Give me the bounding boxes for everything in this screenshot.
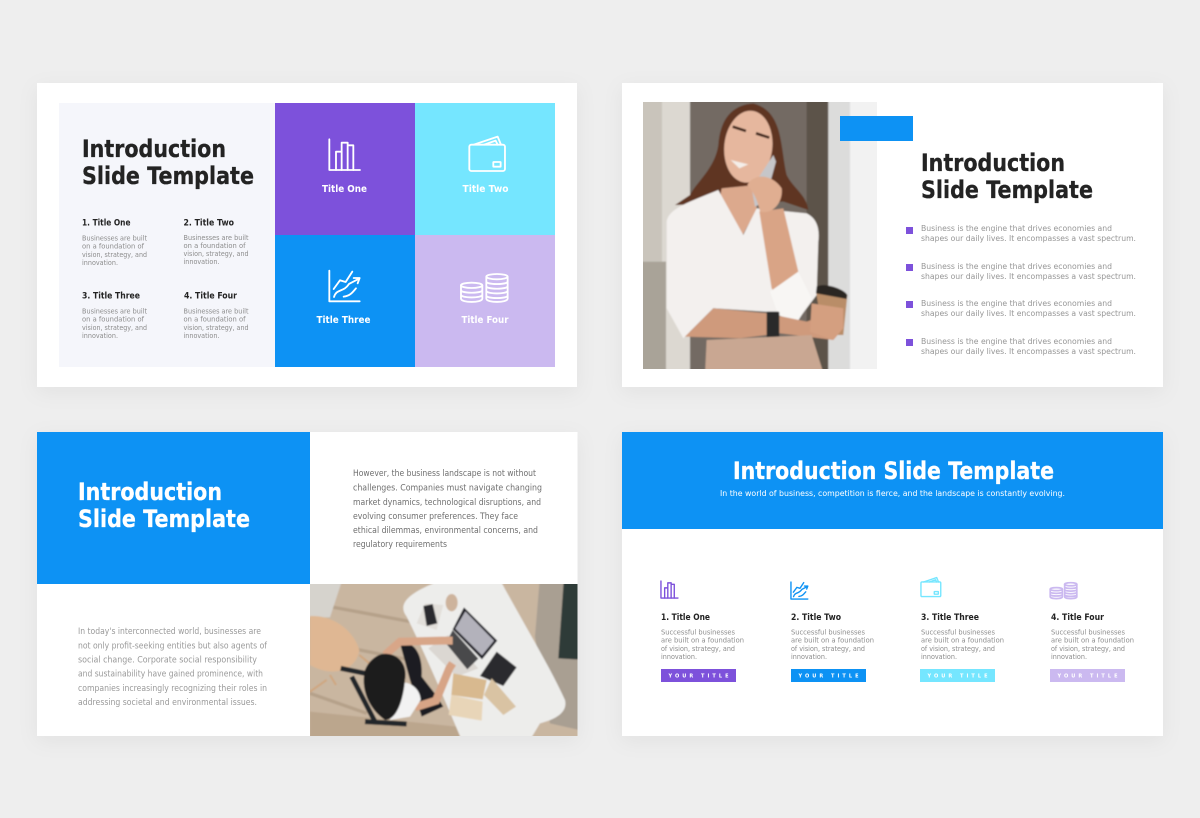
text block: social change: not only profit-seeking entities but also agents of <box>78 642 268 652</box>
column: title two: of vision, strategy, and <box>791 645 865 653</box>
text block: challenges: market dynamics, technological disruptions, and <box>353 498 541 508</box>
column: title two: innovation. <box>791 653 827 661</box>
text block: title three <box>82 290 147 340</box>
text block: challenges: ethical dilemmas, environmental concerns, and <box>353 526 538 536</box>
panel: slide 4 four columns <box>622 432 1163 736</box>
text block: challenges: However, the business landscape is not without <box>353 469 537 479</box>
heading: slide 1: Introduction <box>82 135 226 163</box>
accent block <box>840 116 913 141</box>
text block: title one: vision, strategy, and <box>82 251 147 259</box>
bullet 3: shapes our daily lives. It encompasses a vast spectrum. <box>921 308 1136 318</box>
text block: title one: innovation. <box>82 259 118 267</box>
icon: trend chart <box>791 582 808 599</box>
bullet 2: shapes our daily lives. It encompasses a vast spectrum. <box>921 271 1136 281</box>
text block: title four: Businesses are built <box>184 308 249 316</box>
tile: title four: Title Four <box>462 315 509 326</box>
text block: title two: 2. Title Two <box>184 217 234 228</box>
heading: slide 2: Slide Template <box>921 176 1093 204</box>
column: title two: are built on a foundation <box>791 636 874 644</box>
panel: slide 2 photo and bullets <box>622 83 1163 387</box>
text block: title two <box>184 217 249 266</box>
bullet 4: Business is the engine that drives economies and <box>921 336 1112 346</box>
text block: title three: Businesses are built <box>82 308 147 316</box>
bullet 2 <box>906 261 1136 281</box>
heading: slide 2 <box>921 149 1093 204</box>
text block: title four: innovation. <box>184 332 220 340</box>
text block: title three: 3. Title Three <box>82 290 140 301</box>
column: title one: of vision, strategy, and <box>661 645 735 653</box>
bullet 4 <box>906 336 1136 356</box>
text block: challenges <box>353 469 542 550</box>
text block: title four <box>184 290 249 340</box>
text block: social change: companies increasingly recognizing their roles in <box>78 684 267 694</box>
icon: coins <box>1050 583 1077 599</box>
text block: title two: Businesses are built <box>184 234 249 242</box>
column: title three: YOUR TITLE <box>926 674 988 680</box>
icon: wallet <box>921 578 941 597</box>
icon: trend chart <box>329 271 360 301</box>
bullet 1: Business is the engine that drives economies and <box>921 223 1112 233</box>
text block: title two: vision, strategy, and <box>184 250 248 258</box>
text block: title four: 4. Title Four <box>184 290 237 301</box>
tile: title one: Title One <box>322 184 367 195</box>
column: title three: Successful businesses <box>921 628 995 636</box>
column: title four: are built on a foundation <box>1051 636 1134 644</box>
icon: coins <box>461 274 508 302</box>
bullet 3: Business is the engine that drives economies and <box>921 298 1112 308</box>
photo: woman on the phone <box>640 98 883 375</box>
column: title four: YOUR TITLE <box>1056 674 1118 680</box>
icon: wallet <box>469 137 505 171</box>
heading block: slide 3 <box>37 432 310 584</box>
panel: slide 1 icon grid <box>37 83 577 387</box>
heading: slide 1: Slide Template <box>82 162 254 190</box>
tile: title three: Title Three <box>316 315 371 326</box>
bullet 2: Business is the engine that drives economies and <box>921 261 1112 271</box>
column: title one: YOUR TITLE <box>668 674 729 680</box>
column: title four: 4. Title Four <box>1051 612 1104 623</box>
column: title three <box>920 578 1004 682</box>
text block: social change: social change. Corporate social responsibility <box>78 656 257 666</box>
text block: social change: In today's interconnected world, businesses are <box>78 627 261 637</box>
text block: title two: innovation. <box>184 258 220 266</box>
column: title four: of vision, strategy, and <box>1051 645 1125 653</box>
column: title four: Successful businesses <box>1051 628 1125 636</box>
bullet 1: shapes our daily lives. It encompasses a vast spectrum. <box>921 233 1136 243</box>
column: title four <box>1050 583 1134 682</box>
text block: social change <box>78 627 268 708</box>
icon: bar chart <box>329 139 360 170</box>
text block: challenges: evolving consumer preferences. They face <box>353 512 518 522</box>
column: title one <box>661 581 744 682</box>
column: title one: Successful businesses <box>661 628 735 636</box>
text block: challenges: challenges. Companies must navigate changing <box>353 484 542 494</box>
column: title two: Successful businesses <box>791 628 865 636</box>
tile: title four <box>415 235 555 367</box>
header band: In the world of business, competition is fierce, and the landscape is constantly evolving. <box>720 488 1065 498</box>
bullet 3 <box>906 298 1136 318</box>
text block: social change: addressing societal and environmental issues. <box>78 698 257 708</box>
header band: Introduction Slide Template <box>733 457 1054 485</box>
column: title one: 1. Title One <box>661 612 710 623</box>
column: title three: 3. Title Three <box>921 612 979 623</box>
text block: title two: on a foundation of <box>184 242 246 250</box>
text block: title four: on a foundation of <box>184 316 246 324</box>
heading: slide 2: Introduction <box>921 149 1065 177</box>
column: title three: innovation. <box>921 653 957 661</box>
left text panel <box>59 103 275 367</box>
text block: title four: vision, strategy, and <box>184 324 248 332</box>
column: title one: are built on a foundation <box>661 636 744 644</box>
icon: bar chart <box>661 581 678 598</box>
tile: title two: Title Two <box>462 184 509 195</box>
tile: title one <box>275 103 415 235</box>
tile: title two <box>415 103 555 235</box>
tile: title three <box>275 235 415 367</box>
text block: challenges: regulatory requirements <box>353 540 447 550</box>
column: title one: innovation. <box>661 653 697 661</box>
heading block: slide 3: Introduction <box>78 478 222 506</box>
bullet 1 <box>906 223 1136 243</box>
heading: slide 1 <box>82 135 254 190</box>
photo: woman working at a desk <box>310 584 578 736</box>
heading block: slide 3: Slide Template <box>78 505 250 533</box>
text block: social change: and sustainability have gained prominence, with <box>78 670 263 680</box>
column: title four: innovation. <box>1051 653 1087 661</box>
column: title two <box>791 582 874 682</box>
text block: title three: innovation. <box>82 332 118 340</box>
column: title three: of vision, strategy, and <box>921 645 995 653</box>
header band <box>622 432 1163 529</box>
text block: title one: 1. Title One <box>82 217 130 228</box>
bullet 4: shapes our daily lives. It encompasses a vast spectrum. <box>921 346 1136 356</box>
text block: title one: on a foundation of <box>82 242 145 250</box>
panel: slide 3 split layout <box>37 432 587 743</box>
text block: title three: on a foundation of <box>82 316 145 324</box>
text block: title one <box>82 217 147 267</box>
text block: title three: vision, strategy, and <box>82 324 147 332</box>
text block: title one: Businesses are built <box>82 234 147 242</box>
column: title three: are built on a foundation <box>921 636 1004 644</box>
column: title two: 2. Title Two <box>791 612 841 623</box>
column: title two: YOUR TITLE <box>798 674 859 680</box>
